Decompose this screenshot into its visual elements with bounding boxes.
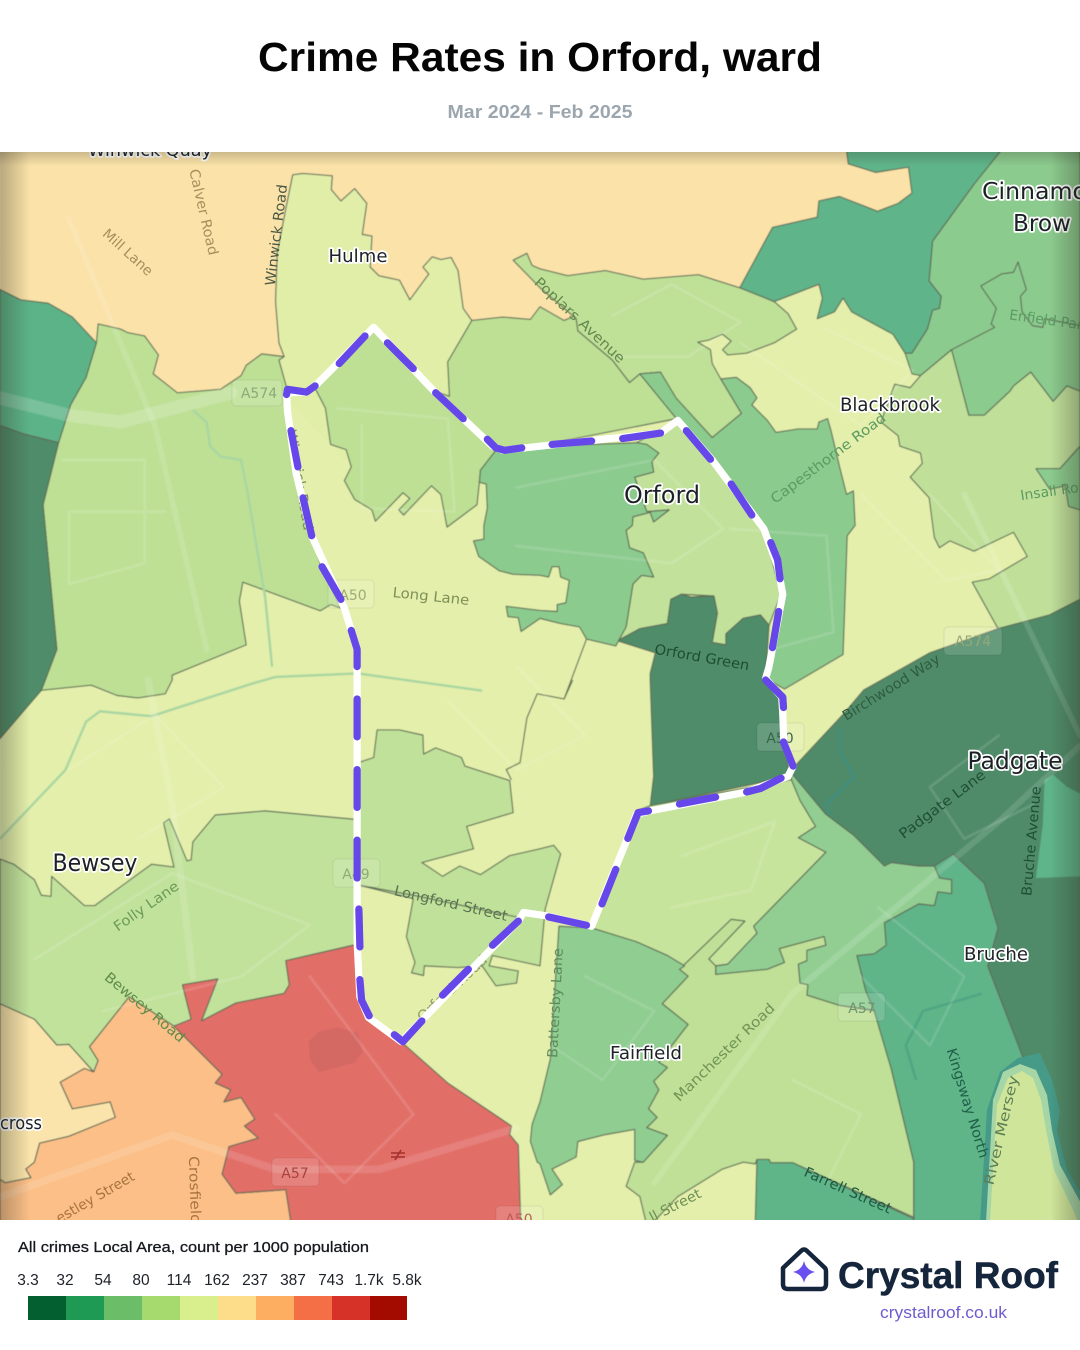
label: Crosfield: Crosfield: [185, 1156, 203, 1224]
website: crystalroof.co.uk: [880, 1304, 1008, 1322]
legend tick labels: 162: [204, 1272, 230, 1289]
shield: A574 west: [232, 380, 282, 406]
legend tick labels: 54: [94, 1272, 112, 1289]
label: Hill Street fragment: ll Street: [647, 1186, 704, 1226]
choropleth areas: [0, 150, 1080, 1224]
shield: A50 north: [328, 580, 374, 608]
label: Farrell Street: Farrell Street: [801, 1164, 894, 1218]
legend colour scale: [28, 1296, 407, 1320]
label: Battersby Lane: Battersby Lane: [545, 948, 567, 1058]
label: River Mersey: River Mersey: [982, 1074, 1022, 1187]
place labels: [0, 141, 1080, 1134]
ward boundary: Orford: [287, 327, 793, 1042]
place: cross: cross: [0, 1113, 42, 1134]
label: Bestley Street: estley Street: [53, 1169, 138, 1227]
place: Bruche: Bruche: [964, 944, 1028, 965]
label: Poplars Avenue: Poplars Avenue: [531, 275, 628, 367]
label: Mill Lane: Mill Lane: [99, 226, 156, 279]
label: Orford Green: Orford Green: [653, 642, 750, 674]
label: Winwick Road south: Winwick Road: [282, 429, 316, 532]
brand: Crystal Roof: [783, 1250, 1059, 1322]
label: Capesthorne Road: Capesthorne Road: [768, 410, 889, 507]
legend tick labels: 743: [318, 1272, 344, 1289]
shield: A574 east: A574: [955, 634, 991, 650]
legend tick labels: 80: [132, 1272, 150, 1289]
legend tick labels: 32: [56, 1272, 74, 1289]
place: Fairfield: Fairfield: [610, 1043, 682, 1064]
place: Hulme: Hulme: [328, 246, 388, 267]
label: Calver Road: Calver Road: [185, 168, 221, 257]
shield: A50 east: A50: [766, 731, 794, 747]
shield: A50 south: [496, 1206, 544, 1220]
road shields: [232, 380, 1002, 1234]
legend tick labels: [17, 1272, 422, 1289]
label: Birchwood Way: Birchwood Way: [840, 651, 943, 724]
label: Padgate Lane: Padgate Lane: [896, 767, 989, 842]
shield: A49: A49: [342, 867, 370, 883]
wordmark: Crystal Roof: [838, 1255, 1059, 1296]
legend tick labels: 1.7k: [354, 1272, 384, 1289]
title: Crime Rates in Orford, ward: [258, 34, 822, 80]
shield: A574 west: A574: [241, 386, 277, 402]
place: Orford: Orford: [624, 481, 700, 509]
shield: A57 east: [838, 993, 885, 1021]
purple dashes: [287, 336, 793, 1042]
subtitle: date range: Mar 2024 - Feb 2025: [448, 102, 632, 122]
label: Manchester Road: Manchester Road: [671, 1000, 778, 1105]
legend tick labels: 387: [280, 1272, 306, 1289]
place: Padgate: Padgate: [968, 747, 1062, 775]
label: Orford Road: Orford Road: [414, 952, 491, 1025]
icon: house with star: [783, 1250, 826, 1289]
shield: A50 north: A50: [339, 588, 367, 604]
place: Blackbrook: Blackbrook: [840, 394, 940, 416]
road labels: [53, 168, 1080, 1227]
roads: [0, 219, 1080, 1197]
shield: A574 east: [944, 627, 1002, 655]
icon: railway station: [391, 1150, 405, 1160]
legend tick labels: 237: [242, 1272, 268, 1289]
shield: A49: [333, 859, 380, 887]
map edge vignette: [0, 152, 1080, 1220]
river mersey: [980, 1053, 1080, 1222]
legend tick labels: 3.3: [17, 1272, 39, 1289]
label: Longford Street: Longford Street: [392, 883, 510, 925]
label: Bewsey Road: Bewsey Road: [101, 969, 188, 1046]
shield: A50 south: A50: [505, 1212, 533, 1228]
shield: A57 south: A57: [281, 1166, 309, 1182]
legend title: All crimes Local Area, count per 1000 population: [18, 1239, 369, 1256]
shield: A57 south: [272, 1158, 319, 1186]
label: Folly Lane: Folly Lane: [111, 878, 182, 935]
label: Kingsway North: Kingsway North: [943, 1046, 991, 1160]
label: Winwick Road north: Winwick Road: [263, 184, 291, 287]
place: Brow: Brow: [1013, 211, 1071, 237]
legend tick labels: 114: [167, 1272, 192, 1289]
place: Bewsey: Bewsey: [52, 849, 138, 877]
legend tick labels: 5.8k: [392, 1272, 422, 1289]
brooks: [0, 410, 982, 1080]
shield: A50 east: [757, 723, 804, 751]
label: Bruche Avenue: Bruche Avenue: [1019, 786, 1045, 897]
label: Long Lane: Long Lane: [392, 585, 470, 609]
legend: [17, 1239, 422, 1320]
place: Winwick Quay: Winwick Quay: [88, 141, 212, 161]
shield: A57 east: A57: [848, 1001, 876, 1017]
